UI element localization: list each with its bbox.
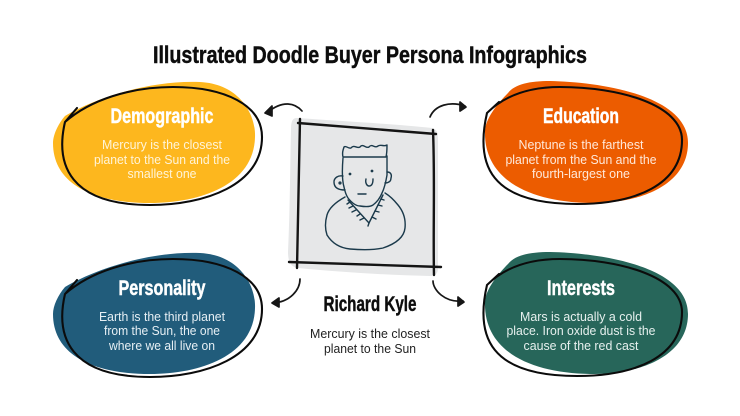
body text <box>94 138 230 181</box>
doodle outline <box>62 259 262 377</box>
body text: Earth is the third planet <box>99 310 225 324</box>
orange blob <box>485 81 688 203</box>
panel: education <box>483 81 688 204</box>
body text: planet to the Sun and the <box>94 153 230 167</box>
heading: Interests <box>547 277 615 300</box>
body text <box>506 138 656 181</box>
body text <box>506 310 656 353</box>
body text: planet from the Sun and the <box>506 153 656 167</box>
arrow: to education <box>430 102 466 117</box>
panel: demographic <box>53 82 262 205</box>
heading: Demographic <box>110 105 214 128</box>
panel: interests <box>483 252 688 376</box>
body text: where we all live on <box>108 339 215 353</box>
body text: Neptune is the farthest <box>518 138 644 152</box>
title: Illustrated Doodle Buyer Persona Infographics <box>153 42 587 69</box>
body text: from the Sun, the one <box>104 324 220 338</box>
panel: personality <box>53 253 262 377</box>
yellow blob <box>53 82 255 203</box>
arrow: to personality <box>272 279 300 307</box>
body text: Mercury is the closest <box>102 138 222 152</box>
doodle outline <box>62 87 262 205</box>
person illustration <box>326 145 405 250</box>
persona description <box>310 327 430 356</box>
arrow: to interests <box>433 281 464 306</box>
green blob <box>485 252 688 374</box>
persona name: Richard Kyle <box>324 293 416 316</box>
persona description: Mercury is the closest <box>310 327 430 341</box>
body text: fourth-largest one <box>532 167 630 181</box>
gray backdrop <box>288 118 438 276</box>
heading: Personality <box>118 277 206 300</box>
blue blob <box>53 253 255 374</box>
frame lines <box>289 119 441 275</box>
body text: place. Iron oxide dust is the <box>506 324 656 338</box>
doodle outline <box>483 259 682 376</box>
body text: smallest one <box>128 167 196 181</box>
persona description: planet to the Sun <box>324 342 416 356</box>
body text: cause of the red cast <box>524 339 639 353</box>
body text <box>99 310 225 353</box>
doodle outline <box>483 87 682 204</box>
portrait frame <box>288 118 441 276</box>
heading: Education <box>543 105 619 128</box>
body text: Mars is actually a cold <box>520 310 642 324</box>
arrow: to demographic <box>265 104 302 116</box>
